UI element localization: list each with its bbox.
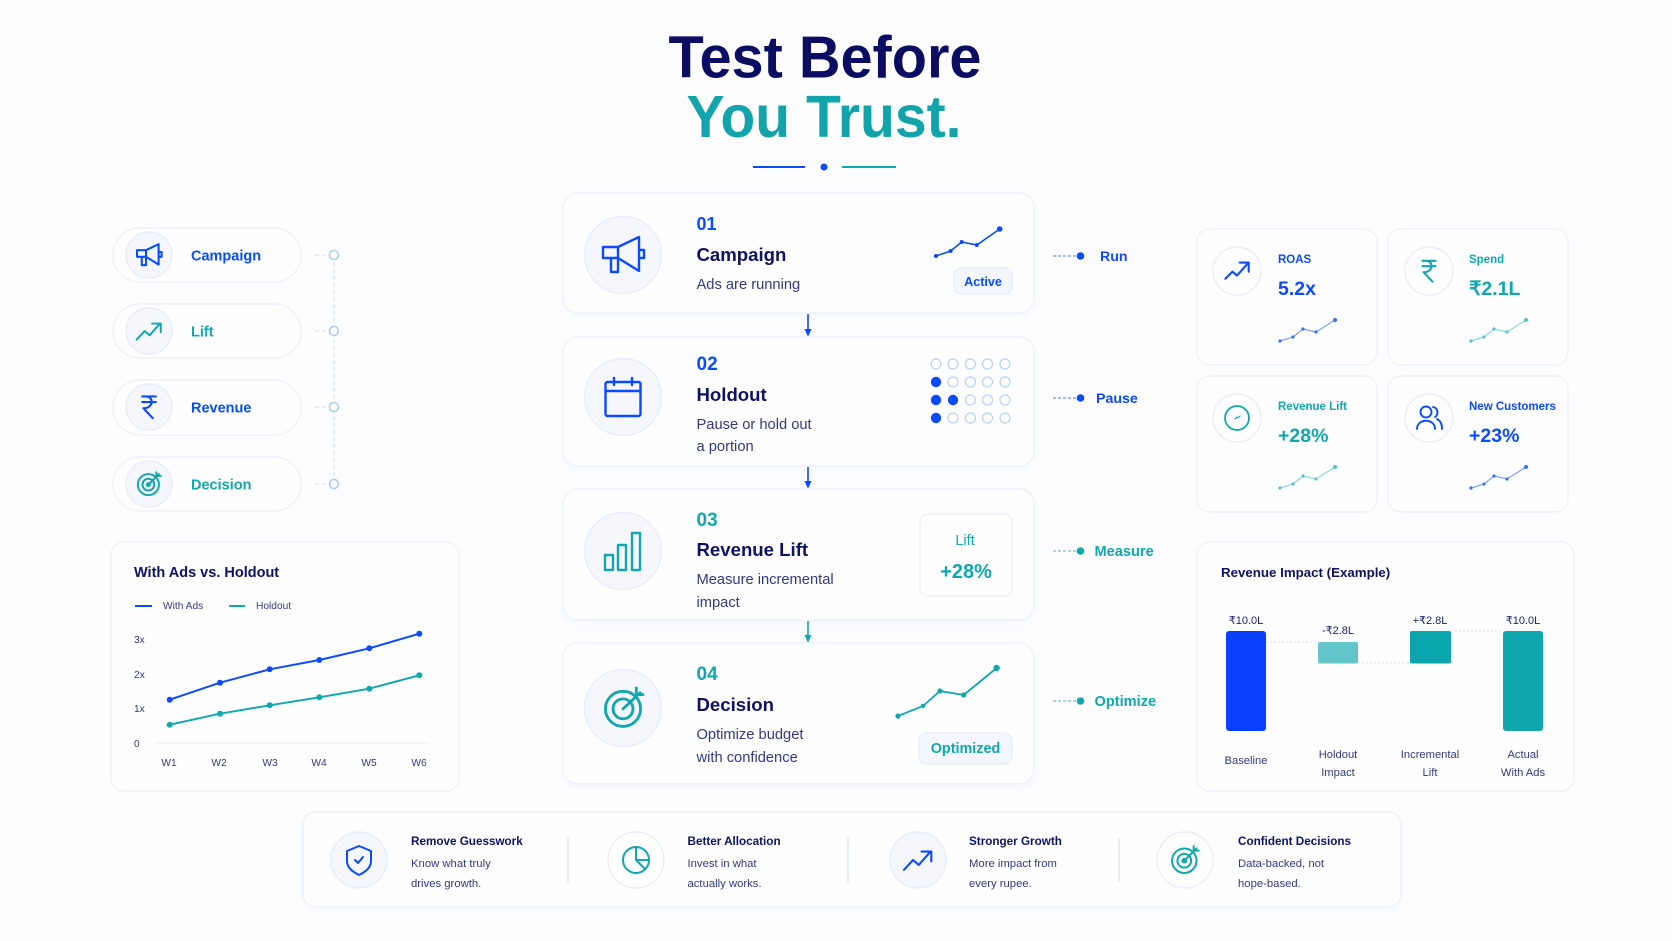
label: pause [1053,391,1138,407]
chart legend: Holdout [256,601,291,612]
panel: left pill navigation [113,228,338,511]
benefit: confident decisions: Data-backed, not [1238,858,1325,870]
lift stat box: +28% [940,561,992,583]
bar category labels [1225,749,1545,779]
panel: step 03 revenue lift: Revenue Lift [696,539,808,560]
panel: kpi spend: Spend [1469,254,1504,266]
x axis labels: W1 [161,758,177,769]
label: measure [1053,544,1154,560]
panel: kpi spend: ₹2.1L [1469,278,1521,300]
panel: step 01 campaign: Campaign [696,244,786,265]
sparkline [934,226,1002,258]
bar value labels: -₹2.8L [1322,625,1354,637]
benefit: better allocation: actually works. [688,878,762,890]
pill: decision: Decision [191,478,251,494]
bar value labels: ₹10.0L [1229,615,1263,627]
benefit: better allocation: Invest in what [688,858,757,870]
arrow: step 3 to 4 [804,621,812,643]
label: optimize: Optimize [1094,694,1156,710]
benefit: remove guesswork [331,832,523,890]
bar category labels: Incremental [1401,749,1459,761]
panel: kpi revenue lift [1197,376,1377,512]
title [668,24,982,150]
y axis labels: 2x [134,670,145,681]
benefit: better allocation [608,832,781,890]
chart title: Revenue Impact (Example) [1221,565,1390,580]
dot matrix [931,359,1010,423]
labels: process actions [1053,249,1156,710]
panel: step 04 decision: Decision [696,694,774,715]
pill: revenue [113,380,338,435]
pill: campaign: Campaign [191,248,261,264]
pill: decision [113,457,338,511]
pill: campaign [113,228,338,282]
lift stat box [920,514,1012,596]
bar value labels: ₹10.0L [1506,615,1540,627]
panel: step 03 revenue lift: 03 [696,510,718,531]
x axis labels: W4 [311,758,327,769]
badge: active [954,268,1012,294]
bar value labels: +₹2.8L [1413,615,1447,627]
arrow: step 1 to 2 [804,314,812,337]
y axis labels [134,635,145,750]
panel: kpi roas: 5.2x [1278,278,1316,300]
pill: lift [113,304,338,358]
benefit: stronger growth [890,832,1062,890]
icon: calendar [606,378,640,416]
panel: step 02 holdout: 02 [696,354,718,375]
panel: step 04 decision [563,643,1034,784]
label: pause: Pause [1096,391,1138,407]
sparkline [895,665,1000,719]
title divider [753,164,896,170]
bar category labels: With Ads [1501,767,1545,779]
y axis labels: 3x [134,635,145,646]
title: You Trust. [686,84,962,150]
panel: step 04 decision: Optimize budget [696,727,803,743]
waterfall bars [1226,631,1543,731]
label: run [1053,249,1128,265]
pill: lift: Lift [191,324,214,340]
panel: step 04 decision: with confidence [696,750,798,766]
benefit: confident decisions [1157,832,1351,890]
benefit: confident decisions: hope-based. [1238,878,1301,890]
benefit: confident decisions: Confident Decisions [1238,835,1351,848]
panel: step 02 holdout: Pause or hold out [696,417,812,433]
benefit: remove guesswork: Remove Guesswork [411,835,523,848]
chart legend [135,601,291,612]
y axis labels: 1x [134,704,145,715]
bar category labels: Actual [1507,749,1539,761]
panel: step 02 holdout: Holdout [696,384,767,405]
bar category labels: Lift [1423,767,1438,779]
benefit: remove guesswork: drives growth. [411,878,481,890]
bar category labels: Holdout [1319,749,1358,761]
x axis labels: W6 [411,758,427,769]
panel: step 02 holdout: a portion [696,439,754,455]
x axis labels: W2 [211,758,227,769]
panel: step 03 revenue lift [563,489,1034,620]
bar category labels: Impact [1321,767,1356,779]
icon: megaphone [603,237,644,272]
panel: benefits bar [303,812,1401,907]
x axis labels: W3 [262,758,278,769]
panel: revenue impact chart [1197,542,1574,791]
icon: target [605,688,643,726]
chart legend: With Ads [163,601,203,612]
label: run: Run [1100,249,1128,265]
label: measure: Measure [1094,544,1154,560]
x axis labels [161,758,427,769]
chart title: With Ads vs. Holdout [134,565,279,581]
panel: kpi new customers: +23% [1469,425,1519,447]
badge: optimized [919,733,1012,764]
panel: kpi new customers: New Customers [1469,401,1556,413]
panel: step 01 campaign: 01 [696,214,717,234]
panel: step 02 holdout [563,337,1034,466]
line chart: with ads [167,631,422,703]
title: Test Before [668,24,982,90]
label: optimize [1053,694,1156,710]
bar value labels [1229,615,1540,637]
benefit: remove guesswork: Know what truly [411,858,491,870]
lift stat box: Lift [955,533,975,549]
line chart: holdout [167,672,422,728]
panel: kpi revenue lift: Revenue Lift [1278,401,1347,413]
panel: step 03 revenue lift: Measure incremental [696,572,834,588]
x axis labels: W5 [361,758,377,769]
benefit: stronger growth: More impact from [969,858,1057,870]
y axis labels: 0 [134,739,140,750]
panel: kpi revenue lift: +28% [1278,425,1328,447]
arrow: step 2 to 3 [804,467,812,489]
badge: optimized: Optimized [931,741,1000,757]
panel: step 04 decision: 04 [696,664,718,685]
panel: with ads vs holdout chart [111,542,459,791]
icon: bar chart [605,533,640,570]
panel: kpi roas [1197,229,1377,365]
benefit: stronger growth: every rupee. [969,878,1032,890]
panel: step 01 campaign: Ads are running [696,277,800,293]
pill: revenue: Revenue [191,400,251,416]
panel: kpi new customers [1388,376,1568,512]
panel: kpi roas: ROAS [1278,254,1312,266]
benefit: better allocation: Better Allocation [688,835,781,848]
bar category labels: Baseline [1225,755,1267,767]
badge: active: Active [964,275,1002,289]
benefit: stronger growth: Stronger Growth [969,835,1062,848]
panel: kpi spend [1388,229,1568,365]
panel: step 01 campaign [563,193,1034,313]
panel: step 03 revenue lift: impact [696,595,740,611]
